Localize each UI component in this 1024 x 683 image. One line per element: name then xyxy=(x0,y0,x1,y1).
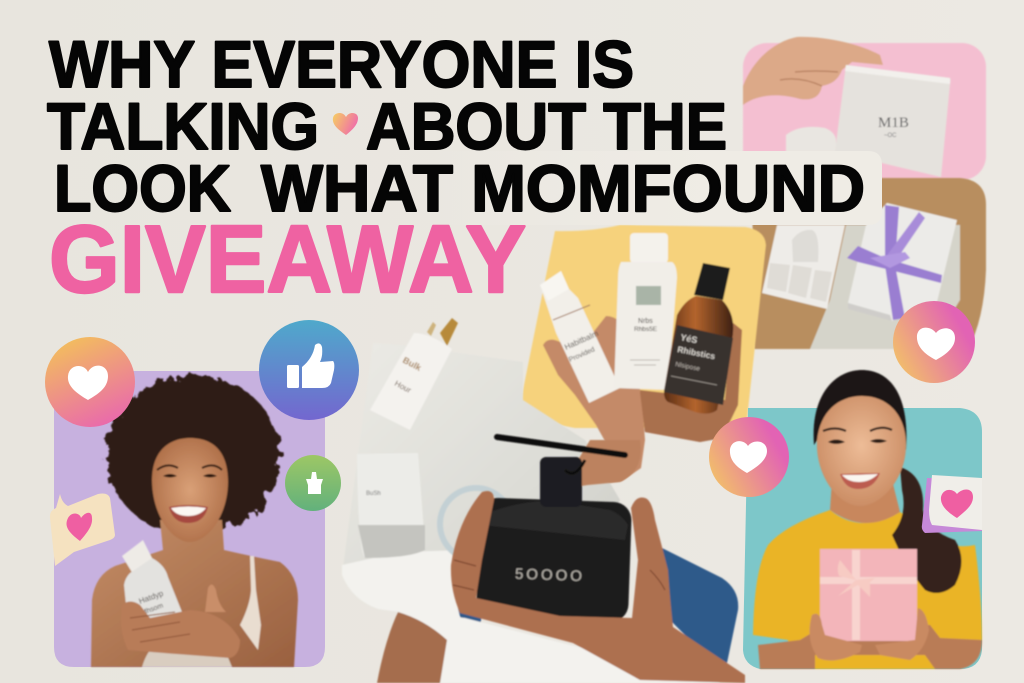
white gift box with purple ribbon xyxy=(847,203,957,321)
face xyxy=(817,396,906,506)
afro hair xyxy=(106,375,280,535)
amber glass bottle: YéS xyxy=(680,332,698,345)
white bottle xyxy=(122,540,184,644)
pink backdrop xyxy=(743,43,986,180)
social card with heart xyxy=(922,475,982,533)
icon: blue thumbs-up badge xyxy=(259,320,359,420)
brows and eyes xyxy=(157,465,222,470)
white lower cloth xyxy=(342,550,465,620)
panel: teal photo with woman and gift xyxy=(743,370,982,669)
lower forearms xyxy=(758,625,982,669)
white gift box with logo: M1B xyxy=(878,115,909,131)
white tall bottle: Rhbs5E xyxy=(634,326,658,333)
title line 2 left: TALKING xyxy=(47,89,319,163)
amber glass bottle: Rhibstics xyxy=(677,344,716,361)
hands holding bottles xyxy=(543,316,742,485)
forearm behind xyxy=(555,440,641,490)
white bottle: Hatdyp xyxy=(138,589,165,606)
neck and shoulders xyxy=(91,520,298,667)
white gift box with logo: ~OC xyxy=(884,133,897,139)
white tube bottle: Habitbalm xyxy=(563,329,600,352)
panel: lilac photo with woman and bottle xyxy=(45,320,359,667)
small blue corner xyxy=(458,608,482,628)
small white cap xyxy=(786,127,836,152)
brows and eyes xyxy=(823,428,892,431)
pale ring xyxy=(440,488,512,560)
panel: pale bathroom still life xyxy=(342,318,620,620)
woman xyxy=(91,375,298,667)
icon: small gradient heart xyxy=(333,113,358,135)
glass jar: BuSh xyxy=(366,491,381,497)
smile xyxy=(840,473,880,489)
title line 3 left: LOOK xyxy=(54,151,231,225)
amber glass bottle: Nlsipose xyxy=(675,361,701,373)
black soap dispenser: 5OOOO xyxy=(515,566,585,585)
lilac backdrop xyxy=(54,371,325,667)
white bottle: Mhsom xyxy=(140,602,164,617)
panel: yellow products photo xyxy=(520,225,766,485)
hands over bottle xyxy=(121,602,240,658)
top strap xyxy=(240,556,261,650)
ponytail xyxy=(892,467,962,593)
title line 4: giveaway: GIVEAWAY xyxy=(49,206,526,313)
title line 3 right: WHAT MOMFOUND xyxy=(261,151,865,225)
pale backdrop xyxy=(342,343,620,610)
icon: orange heart badge xyxy=(45,337,135,427)
panel: kraft unboxing photo xyxy=(752,178,986,349)
icon: green badge xyxy=(285,455,341,511)
spray bottle with gold pump xyxy=(370,318,458,430)
teal backdrop xyxy=(743,408,982,669)
hair xyxy=(814,370,907,450)
white tube bottle: Provided xyxy=(568,346,596,364)
white insert tray xyxy=(762,225,845,309)
white shirt xyxy=(380,610,720,683)
bare arm left xyxy=(377,612,447,683)
smile xyxy=(169,505,208,523)
neck xyxy=(830,480,900,523)
speech bubble with heart xyxy=(50,494,115,566)
panel: pink box photo xyxy=(743,37,986,180)
grey surface xyxy=(810,225,960,349)
white tube bottle xyxy=(540,271,620,403)
white tall bottle: Nrbs xyxy=(638,318,653,325)
title line 2 right: ABOUT THE xyxy=(366,89,727,163)
yellow backdrop xyxy=(520,225,766,428)
face xyxy=(152,438,228,542)
hands holding gift xyxy=(810,614,862,660)
pink gift box xyxy=(820,549,917,641)
spray bottle with gold pump: Hour xyxy=(393,379,413,395)
kraft backdrop xyxy=(752,178,986,349)
blue denim patch xyxy=(650,545,738,663)
woman xyxy=(753,370,982,669)
icon: hand holding box xyxy=(743,37,883,105)
spray bottle with gold pump: Bulk xyxy=(401,355,424,373)
title line 1: WHY EVERYONE IS xyxy=(49,27,634,101)
yellow sweater xyxy=(753,510,982,669)
icon: heart badge on kraft photo xyxy=(893,301,975,383)
cream highlight behind third line xyxy=(228,151,882,225)
white tall bottle xyxy=(614,233,677,390)
white gift box with logo xyxy=(835,65,950,177)
amber glass bottle xyxy=(664,263,733,414)
hand cradling device xyxy=(451,491,745,683)
glass jar xyxy=(357,453,425,558)
panel: blue fabric and hands with black device xyxy=(377,437,745,683)
icon: heart badge by teal photo xyxy=(709,417,789,497)
title block xyxy=(47,27,882,313)
black soap dispenser xyxy=(476,437,632,623)
